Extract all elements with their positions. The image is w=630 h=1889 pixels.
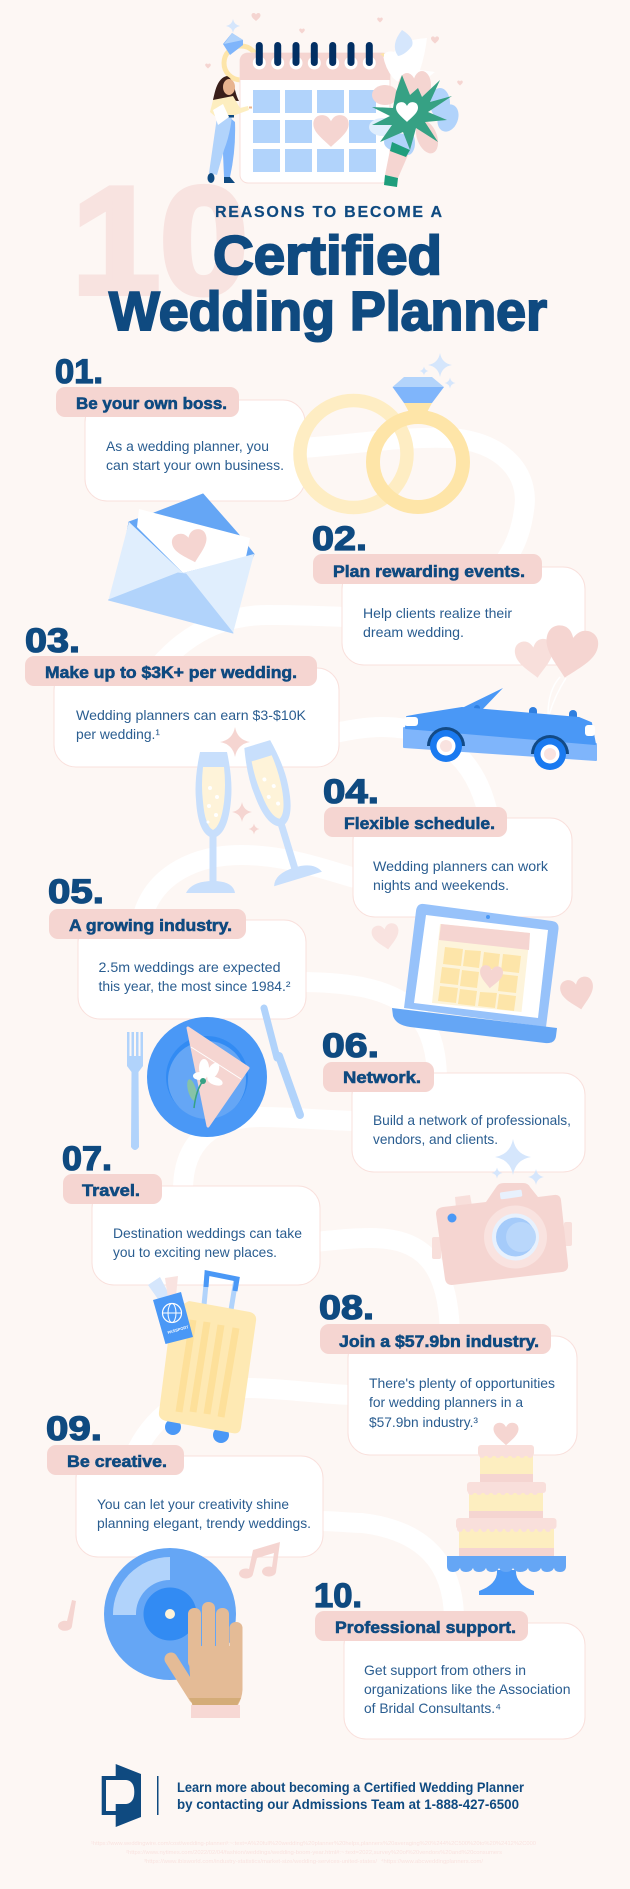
header illustration: calendar with planner, ring, dove and bouquet [205,13,463,187]
panel: 10 professional support: Get support from others in [364,1662,526,1678]
footnotes: ¹https://www.weddingwire.com/cost/wedding-planner#:~:text=A%20full%20wedding%20planner%20helps,planners%20averaging%20%244%2C500%20to%20%2412%2C000 [91,1841,536,1847]
icon: wedding planner figure [208,76,252,183]
panel: 03 make up to $3K+: Wedding planners can earn $3-$10K [76,707,307,723]
panel: 06 network: Network. [343,1068,421,1087]
winding white road background [137,438,525,1620]
panel: 02 plan rewarding events [312,520,585,665]
title: REASONS TO BECOME A [215,204,442,221]
icon: wedding rings [300,353,463,508]
footnotes: ²https://www.nytimes.com/2022/02/04/fashion/weddings/wedding-boom-year.html#:~:text=2022,survey%20of%20vendors%20and%20consumers [126,1850,502,1856]
panel: 08 join a $57.9bn industry [319,1289,577,1455]
icon: suitcase with passport [148,1273,256,1443]
panel: 07 travel: Travel. [82,1181,140,1200]
panel: 06 network: 06. [322,1027,379,1065]
panel: 07 travel: you to exciting new places. [113,1244,277,1260]
panel: 06 network: vendors, and clients. [373,1131,498,1147]
footnotes: ⁴https://www.abcweddingplanners.com/ [381,1858,483,1865]
hand [171,1602,242,1705]
title: Wedding Planner [109,280,547,342]
panel: 01 be your own boss: can start your own business. [106,457,284,473]
footnotes [91,1841,536,1865]
icon: gold ring behind calendar [223,19,258,80]
panel: 06 network: Build a network of professionals, [373,1112,571,1128]
panel: 10 professional support [314,1577,585,1739]
tickets [148,1276,178,1302]
panel: 08 join a $57.9bn industry: for wedding planners in a [369,1394,523,1410]
panel: 03 make up to $3K+: 03. [25,622,80,660]
icon: loose hearts beside laptop [371,922,597,1013]
panel: 05 a growing industry [48,873,306,1019]
panel: 09 be creative [46,1410,323,1557]
panel: 03 make up to $3K+: Make up to $3K+ per wedding. [45,663,297,682]
panel: 05 a growing industry: A growing industry. [69,916,232,935]
panel: 03 make up to $3K+ [25,622,339,767]
panel: 10 professional support: 10. [314,1577,362,1615]
panel: 08 join a $57.9bn industry: 08. [319,1289,374,1327]
icon: bouquet [369,71,462,187]
fork [127,1032,143,1150]
panel: 07 travel: Destination weddings can take [113,1225,302,1241]
footer logo [102,1764,141,1827]
panel: 02 plan rewarding events: dream wedding. [363,624,464,640]
panel: 08 join a $57.9bn industry: There's plenty of opportunities [369,1375,555,1391]
footer call to action: by contacting our Admissions Team at 1-888-427-6500 [177,1796,519,1812]
panel: 04 flexible schedule: Flexible schedule. [344,814,495,833]
panel: 02 plan rewarding events: 02. [312,520,367,558]
panel: 08 join a $57.9bn industry: Join a $57.9bn industry. [339,1332,539,1351]
title: Certified [213,224,442,286]
panel: 07 travel: 07. [62,1140,112,1178]
panel: 04 flexible schedule: Wedding planners can work [373,858,549,874]
title [109,204,547,342]
panel: 05 a growing industry: 2.5m weddings are expected [98,959,280,975]
panel: 01 be your own boss: Be your own boss. [76,394,227,413]
footer call to action [177,1779,525,1812]
panel: 06 network [322,1027,585,1172]
panel: 01 be your own boss: As a wedding planner, you [106,438,269,454]
passport [153,1292,193,1344]
panel: 08 join a $57.9bn industry: $57.9bn industry.³ [369,1414,478,1430]
knife [264,1008,300,1115]
panel: 09 be creative: 09. [46,1410,102,1448]
panel: 09 be creative: planning elegant, trendy weddings. [97,1515,311,1531]
calendar [240,42,390,183]
footer call to action: Learn more about becoming a Certified Wedding Planner [177,1779,525,1795]
panel: 09 be creative: Be creative. [67,1452,167,1471]
panel: 02 plan rewarding events: Plan rewarding events. [333,562,525,581]
panel: 01 be your own boss: 01. [55,353,103,391]
panel: 03 make up to $3K+: per wedding.¹ [76,726,160,742]
icon: convertible car [404,688,596,770]
left flute [186,752,235,893]
footnotes: ³https://www.ibisworld.com/industry-statistics/market-size/wedding-services-united-states/ [144,1859,377,1865]
panel: 04 flexible schedule [323,773,572,917]
panel: 09 be creative: You can let your creativity shine [97,1496,289,1512]
panel: 04 flexible schedule: nights and weekends. [373,877,509,893]
big background number 10: 10 [72,156,248,326]
panel: 05 a growing industry: this year, the most since 1984.² [98,978,291,994]
right flute [233,737,322,886]
panel: 07 travel [62,1140,320,1285]
panel: 04 flexible schedule: 04. [323,773,379,811]
icon: laptop with calendar [392,904,559,1043]
icon: music notes [58,1542,280,1631]
panel: 10 professional support: of Bridal Consultants.⁴ [364,1700,501,1716]
passport: PASSPORT [167,1324,190,1335]
icon: camera [432,1139,572,1285]
icon: heart balloons [514,623,601,715]
stand [447,1556,566,1595]
icon: small floating hearts [205,13,463,86]
panel: 05 a growing industry: 05. [48,873,104,911]
panel: 02 plan rewarding events: Help clients realize their [363,605,512,621]
panel: 10 professional support: organizations like the Association [364,1681,570,1697]
sparkles [220,727,260,834]
panel: 01 be your own boss [55,353,305,501]
panel: 10 professional support: Professional support. [335,1618,516,1637]
icon: vinyl record with hand [104,1548,242,1718]
icon: envelope with heart letter [108,494,254,633]
icon: dove [380,30,435,85]
icon: champagne flutes [186,727,322,893]
footer divider [157,1776,158,1815]
icon: plate with napkin, fork and knife [127,1008,300,1150]
icon: wedding cake [447,1423,566,1595]
